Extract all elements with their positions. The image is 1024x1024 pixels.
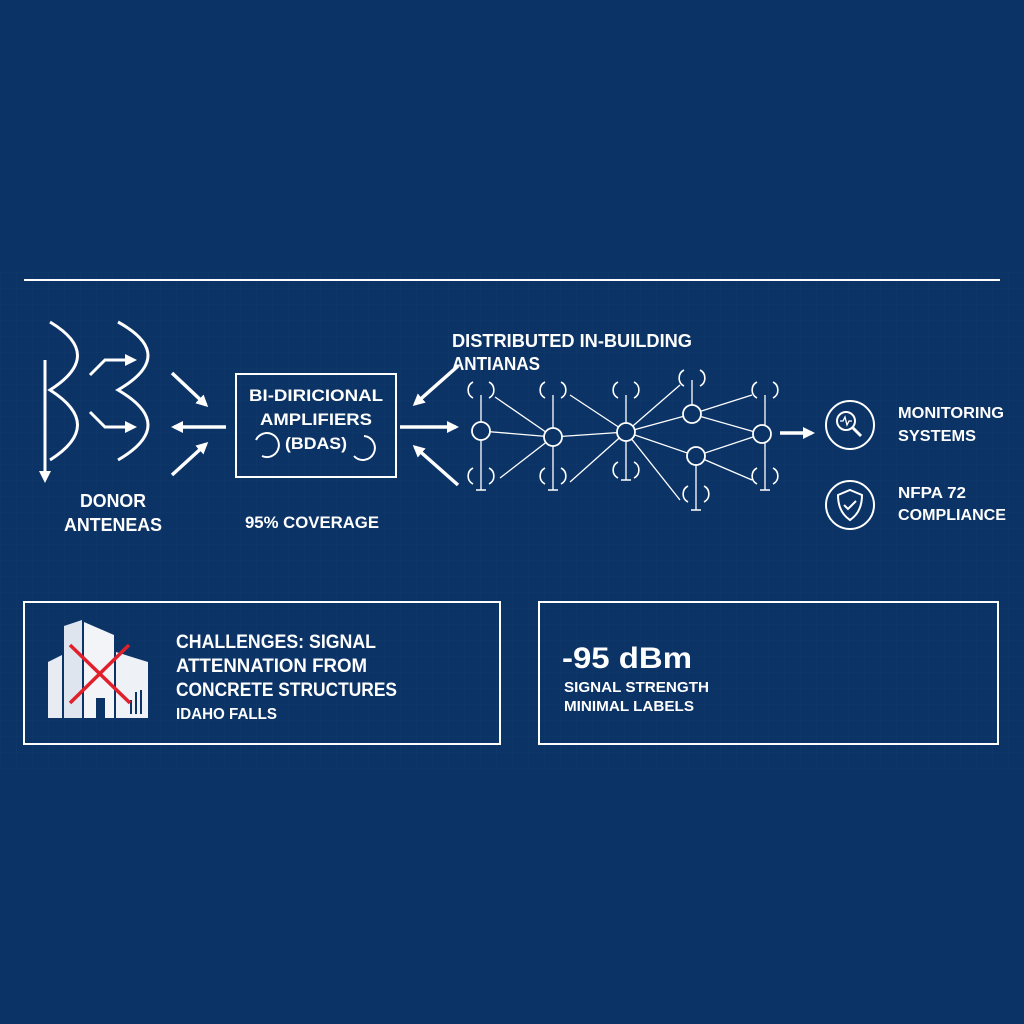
label: donor antennas: ANTENEAS bbox=[64, 515, 162, 535]
heading: distributed antennas bbox=[452, 331, 692, 374]
box: bi-directional amplifiers: BI-DIRICIONAL bbox=[249, 386, 383, 405]
panel: signal strength: SIGNAL STRENGTH bbox=[564, 679, 709, 696]
label: donor antennas bbox=[64, 491, 162, 535]
panel: challenges: CHALLENGES: SIGNAL bbox=[176, 632, 376, 653]
panel: signal strength: MINIMAL LABELS bbox=[564, 698, 694, 715]
arrows: left to BDA bbox=[172, 373, 226, 475]
panel: signal strength bbox=[539, 602, 998, 744]
icon: monitoring bbox=[826, 401, 874, 449]
panel: challenges: IDAHO FALLS bbox=[176, 706, 277, 723]
box: bi-directional amplifiers bbox=[236, 374, 396, 477]
arrow: to monitoring bbox=[780, 431, 812, 435]
box: bi-directional amplifiers: (BDAS) bbox=[285, 434, 347, 453]
panel: signal strength: -95 dBm bbox=[562, 642, 692, 675]
panel: challenges bbox=[24, 602, 500, 744]
box: bi-directional amplifiers: AMPLIFIERS bbox=[260, 410, 372, 429]
label: compliance bbox=[898, 485, 1006, 524]
network diagram bbox=[468, 370, 778, 510]
label: coverage: 95% COVERAGE bbox=[245, 513, 379, 532]
panel: challenges: CONCRETE STRUCTURES bbox=[176, 680, 397, 701]
label: monitoring: SYSTEMS bbox=[898, 428, 976, 445]
heading: distributed antennas: DISTRIBUTED IN-BUILDING bbox=[452, 331, 692, 351]
label: compliance: NFPA 72 bbox=[898, 485, 966, 502]
label: monitoring bbox=[898, 405, 1004, 445]
arrows: right to BDA bbox=[400, 366, 458, 485]
label: donor antennas: DONOR bbox=[80, 491, 146, 511]
label: monitoring: MONITORING bbox=[898, 405, 1004, 422]
icon: donor antennas bbox=[45, 322, 148, 480]
label: compliance: COMPLIANCE bbox=[898, 507, 1006, 524]
icon: shield bbox=[826, 481, 874, 529]
heading: distributed antennas: ANTIANAS bbox=[452, 354, 540, 374]
panel: challenges: ATTENNATION FROM bbox=[176, 656, 367, 677]
icon: building with X bbox=[48, 620, 148, 718]
